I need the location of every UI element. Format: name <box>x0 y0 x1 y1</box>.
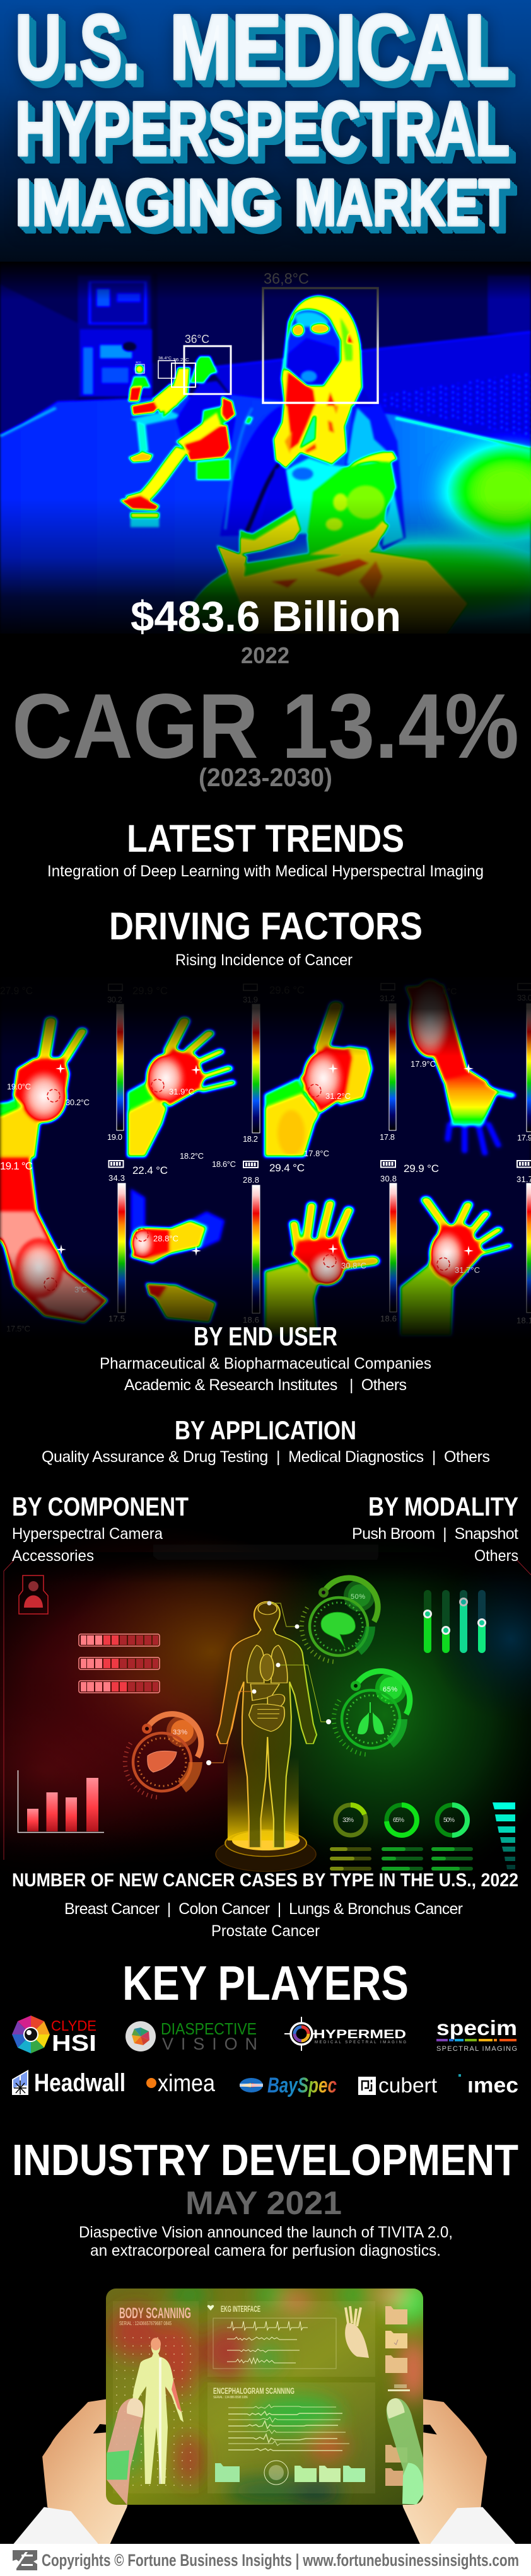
body scanning figure <box>131 2338 184 2484</box>
temperature readings: 19.1 °C <box>0 1160 33 1172</box>
gauge: lungs 65%: 65% <box>383 1686 397 1693</box>
by modality items: Push Broom | Snapshot <box>352 1525 518 1543</box>
logo: Hypermed <box>284 2017 406 2051</box>
logo: BaySpec: BaySpec <box>267 2074 337 2097</box>
temperature readings: 29.9 °C <box>404 1163 439 1175</box>
logo: Clyde HSI: CLYDE <box>51 2017 96 2034</box>
logo: Hypermed: HYPERMED <box>313 2028 406 2041</box>
hero temperature boxes: 36°C <box>185 333 209 345</box>
woman torso and lower hair in native crop coordinates <box>240 403 406 555</box>
by component heading: BY COMPONENT <box>12 1492 189 1521</box>
logo: Imec: ımec <box>467 2074 518 2097</box>
temperature readings: 3°C <box>74 1285 87 1294</box>
title <box>15 0 510 240</box>
thumbs over the tablet <box>107 2398 423 2505</box>
temperature readings: 34.3 <box>108 1173 125 1183</box>
temperature readings: 17.8 <box>380 1132 395 1142</box>
by end user heading: BY END USER <box>194 1321 337 1351</box>
logo: BaySpec <box>240 2074 337 2097</box>
temperature readings: 29.6 °C <box>269 984 305 996</box>
development date: MAY 2021 <box>185 2185 342 2222</box>
donut charts: 50% <box>443 1817 455 1824</box>
backpack strap <box>220 405 295 537</box>
tablet panel labels: BODY SCANNING <box>119 2305 191 2322</box>
tablet panel labels: EKG INTERFACE <box>221 2304 260 2314</box>
logo: Specim: specim <box>436 2016 517 2039</box>
temperature readings: .0°C <box>440 986 457 996</box>
human body figure <box>217 1602 317 1848</box>
temperature readings: 30.2 <box>107 995 122 1004</box>
logo: Headwall: Headwall <box>34 2069 125 2097</box>
red target marks <box>44 1079 450 1291</box>
by application heading: BY APPLICATION <box>175 1415 356 1445</box>
hands and sleeves <box>13 2399 515 2544</box>
temperature readings: 29.4 °C <box>269 1162 305 1174</box>
second person <box>176 381 235 448</box>
development description <box>79 2224 453 2260</box>
CAGR period: (2023-2030) <box>199 763 332 792</box>
progress bars <box>79 1634 160 1693</box>
logo: Diaspective Vision: VISION <box>162 2034 257 2053</box>
footer <box>0 2544 531 2576</box>
gauge: liver 33%: 33% <box>173 1729 187 1736</box>
driving factors text: Rising Incidence of Cancer <box>175 951 353 969</box>
by component items <box>12 1525 163 1565</box>
temperature readings: 19.0 <box>107 1132 122 1142</box>
temperature readings: 29.9 °C <box>132 985 168 997</box>
donut charts: 65% <box>393 1817 404 1824</box>
logo: Specim <box>436 2016 517 2053</box>
logo: Hypermed: MEDICAL SPECTRAL IMAGING <box>315 2041 406 2045</box>
by modality items <box>352 1525 518 1565</box>
tablet panel labels: SERIAL : 134 886 6598 1086 <box>213 2396 248 2399</box>
latest trends text: Integration of Deep Learning with Medical Hyperspectral Imaging <box>47 862 484 880</box>
logo: Cubert: cubert <box>378 2074 437 2097</box>
tablet panel labels: SERIAL : 12436657679687 0845 <box>119 2321 172 2326</box>
temperature readings: 18.6 <box>380 1314 397 1323</box>
cancer cases items: Breast Cancer | Colon Cancer | Lungs & Bronchus Cancer <box>64 1900 463 1918</box>
key players heading: KEY PLAYERS <box>122 1956 409 2010</box>
icon: patient profile <box>19 1575 48 1614</box>
market size year: 2022 <box>241 642 289 668</box>
battery icons <box>108 983 531 1168</box>
latest trends heading: LATEST TRENDS <box>127 817 404 860</box>
holographic pedestal <box>216 1757 316 1871</box>
hero temperature boxes: 36,8°C <box>264 270 309 287</box>
temperature readings: 22.4 °C <box>132 1164 168 1176</box>
gauge: brain 50% <box>301 1578 378 1662</box>
third person <box>135 365 144 374</box>
market size value: $483.6 Billion <box>131 593 401 641</box>
by end user items: Academic & Research Institutes | Others <box>124 1376 407 1394</box>
hero temperature boxes: 36.4°C <box>158 357 172 361</box>
by end user items: Pharmaceutical & Biopharmaceutical Companies <box>100 1355 431 1372</box>
logo: Diaspective Vision <box>125 2019 257 2053</box>
by application items: Quality Assurance & Drug Testing | Medical Diagnostics | Others <box>42 1448 490 1466</box>
temperature readings: 30.8 <box>380 1174 397 1183</box>
development description: Diaspective Vision announced the launch of TIVITA 2.0, <box>79 2224 453 2241</box>
gauge: lungs 65% <box>334 1671 410 1755</box>
hero temperature boxes: 36.2°C <box>173 357 189 363</box>
hero temperature boxes <box>136 270 378 403</box>
thermal hands grid <box>0 977 531 1352</box>
temperature readings: 19.0°C <box>7 1082 31 1091</box>
icon: Fortune Business Insights logo <box>13 2550 37 2570</box>
temperature readings: 30.8°C <box>341 1261 366 1270</box>
temperature readings: 17.8°C <box>304 1149 329 1158</box>
temperature readings: 31.9°C <box>169 1087 194 1096</box>
header background <box>0 0 531 262</box>
small progress lines <box>330 1847 473 1871</box>
temperature readings: 28.8 <box>243 1175 259 1185</box>
temperature readings: 18.2°C <box>180 1151 204 1161</box>
by component items: Hyperspectral Camera <box>12 1525 163 1543</box>
temperature readings: 17.9°C <box>411 1059 436 1069</box>
illustration: hands holding medical tablet <box>13 2280 515 2544</box>
tablet panel labels <box>119 2304 295 2399</box>
temperature readings: 31.9 <box>243 995 258 1004</box>
temperature readings: 31.7°C <box>455 1265 480 1275</box>
development description: an extracorporeal camera for perfusion diagnostics. <box>90 2242 441 2260</box>
cancer cases items: Prostate Cancer <box>211 1922 320 1940</box>
temperature readings: 18.6°C <box>212 1159 236 1169</box>
by component items: Accessories <box>12 1547 94 1565</box>
donut charts <box>336 1805 467 1835</box>
temperature readings: 18.6 <box>243 1315 259 1325</box>
temperature readings: 31.2 <box>380 994 395 1003</box>
logo: Clyde HSI: HSI <box>52 2030 96 2056</box>
driving factors heading: DRIVING FACTORS <box>109 905 423 948</box>
woman hair and face <box>281 296 363 405</box>
temperature readings: 17.5 <box>108 1314 125 1323</box>
infographic panel: human body HUD <box>0 1526 531 1891</box>
logo: Diaspective Vision: DIASPECTIVE <box>161 2019 257 2038</box>
temperature readings <box>0 984 531 1333</box>
by modality items: Others <box>474 1547 518 1565</box>
temperature readings: 28.8°C <box>153 1234 178 1243</box>
bar chart <box>18 1770 104 1832</box>
title: IMAGING <box>15 166 277 240</box>
EKG grid and traces <box>213 2318 336 2369</box>
connector lines <box>206 1601 331 1765</box>
logo: Ximea: ximea <box>158 2070 216 2097</box>
lap <box>176 554 406 644</box>
gauge: liver 33% <box>125 1714 202 1797</box>
stepped level indicator <box>493 1802 515 1869</box>
by end user items <box>100 1355 431 1394</box>
temperature readings: 17.5°C <box>6 1324 30 1333</box>
temperature readings: 30.2°C <box>66 1098 90 1107</box>
EEG traces <box>228 2405 349 2451</box>
heart illustration <box>345 2306 369 2358</box>
logo: Clyde HSI <box>12 2016 96 2056</box>
temperature readings: 31.2°C <box>325 1091 351 1101</box>
hero: thermal image of seated people <box>0 259 531 644</box>
logo: Headwall <box>12 2069 125 2097</box>
temperature readings: 27.9 °C <box>0 985 33 997</box>
temperature readings: 18.2 <box>243 1134 258 1144</box>
logo: Specim: SPECTRAL IMAGING <box>436 2045 517 2053</box>
gauge: brain 50%: 50% <box>351 1593 365 1601</box>
donut charts: 33% <box>342 1817 354 1824</box>
hero temperature boxes: 36°C <box>136 361 141 364</box>
tablet panel labels: ENCEPHALOGRAM SCANNING <box>213 2386 295 2396</box>
tablet screen <box>106 2280 431 2505</box>
cancer cases items <box>64 1900 463 1940</box>
colour scale bars <box>117 1004 531 1313</box>
sliders <box>424 1590 486 1653</box>
crosshair markers <box>55 1064 474 1256</box>
tablet folders <box>215 2306 410 2486</box>
